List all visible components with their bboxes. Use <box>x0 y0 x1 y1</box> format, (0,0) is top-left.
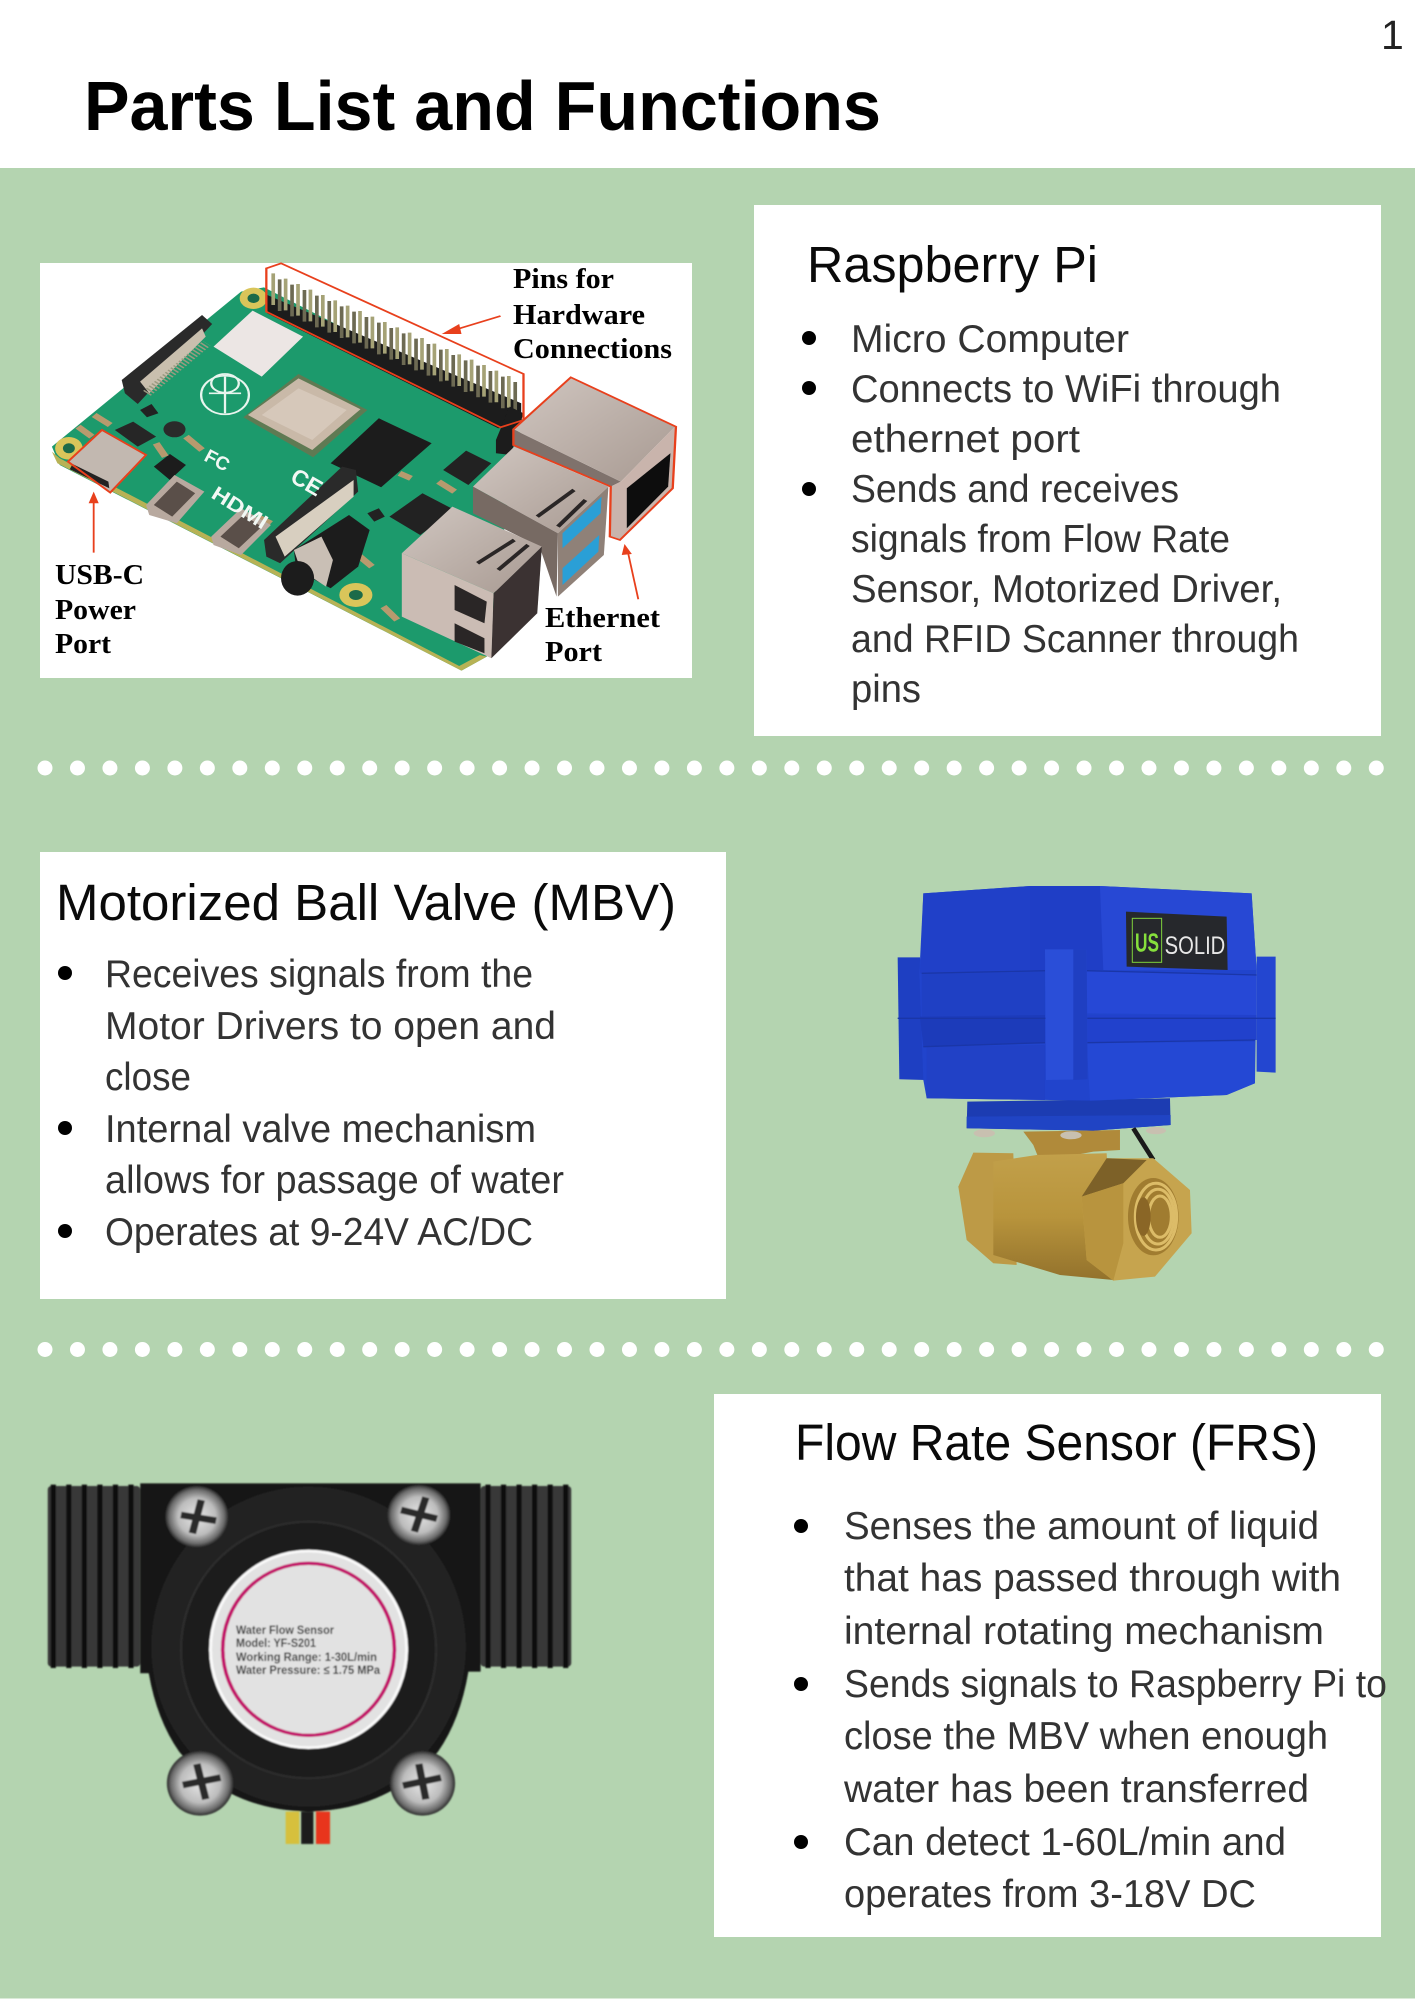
flow rate sensor image <box>48 1483 571 1844</box>
connector strip <box>264 467 358 563</box>
bullet list: Sends signals to Raspberry Pi to <box>844 1663 1387 1706</box>
wires <box>286 1812 330 1844</box>
bullet list <box>58 953 564 1254</box>
bullet list: allows for passage of water <box>105 1159 564 1202</box>
bullet list: Operates at 9-24V AC/DC <box>105 1211 533 1254</box>
usb ports lower <box>402 507 542 658</box>
bullet list <box>794 1505 1387 1916</box>
sensor label text: Water Flow Sensor <box>236 1623 334 1637</box>
bullet list: ethernet port <box>851 418 1080 461</box>
bullet list: Sensor, Motorized Driver, <box>851 568 1282 611</box>
sensor body <box>140 1483 481 1812</box>
ethernet port <box>513 377 676 540</box>
bullet list: signals from Flow Rate <box>851 518 1230 561</box>
panel: Raspberry Pi image <box>40 263 692 678</box>
heading: Raspberry Pi <box>807 236 1098 293</box>
label: ethernet <box>545 602 660 668</box>
label: pins <box>513 263 672 365</box>
label: ethernet: Ethernet <box>545 602 660 634</box>
blue actuator housing <box>898 886 1276 1101</box>
bullet list: Internal valve mechanism <box>105 1108 536 1151</box>
bullet list: Senses the amount of liquid <box>844 1505 1319 1548</box>
bullet list: internal rotating mechanism <box>844 1610 1324 1653</box>
bullet list: Connects to WiFi through <box>851 368 1281 411</box>
screws <box>165 1485 455 1816</box>
brand badge <box>1126 912 1228 970</box>
bullet list: Can detect 1-60L/min and <box>844 1821 1286 1864</box>
gpio pins <box>267 273 521 428</box>
board silkscreen marks: HDMI <box>207 483 272 534</box>
audio jack <box>294 515 370 588</box>
label: ethernet: Port <box>545 636 602 668</box>
brand badge: SOLID <box>1165 932 1225 960</box>
label: usb-c: USB-C <box>55 559 144 591</box>
bullet list: close the MBV when enough <box>844 1715 1328 1758</box>
bullet list: Sends and receives <box>851 468 1179 511</box>
bullet list: and RFID Scanner through <box>851 618 1299 661</box>
bullet list: operates from 3-18V DC <box>844 1873 1256 1916</box>
label: pins: Hardware <box>513 299 645 331</box>
brass body <box>958 1128 1192 1281</box>
motorized ball valve image <box>898 886 1276 1281</box>
usb ports upper <box>473 447 608 597</box>
sensor label text: Model: YF-S201 <box>236 1636 316 1650</box>
label: usb-c <box>55 559 144 660</box>
board silkscreen marks <box>201 446 327 534</box>
sensor label text: Water Pressure: ≤ 1.75 MPa <box>236 1663 380 1677</box>
arrow: ethernet <box>622 544 638 599</box>
raspberry logo <box>201 374 249 414</box>
bullet list <box>802 318 1299 711</box>
small components <box>78 415 455 620</box>
heading: Motorized Ball Valve (MBV) <box>56 874 676 931</box>
sensor label text <box>236 1623 380 1677</box>
panel: Raspberry Pi text <box>754 205 1381 736</box>
bullet list: that has passed through with <box>844 1557 1341 1600</box>
threaded pipe left <box>48 1485 140 1668</box>
page number: 1 <box>1381 12 1404 58</box>
label: pins: Pins for <box>513 263 614 295</box>
panel: Motorized Ball Valve text <box>40 852 726 1299</box>
title: Parts List and Functions <box>84 67 881 145</box>
dotted divider 1 <box>45 760 1380 776</box>
label: usb-c: Port <box>55 628 111 660</box>
bullet list: water has been transferred <box>843 1768 1309 1811</box>
bullet list: Micro Computer <box>851 318 1129 361</box>
raspberry pi board illustration <box>52 263 676 671</box>
board silkscreen marks: FC <box>201 446 233 476</box>
brand badge: US <box>1135 928 1159 958</box>
board silkscreen marks: CE <box>286 463 327 501</box>
bullet list: Receives signals from the <box>105 953 533 996</box>
bullet list: Motor Drivers to open and <box>105 1005 556 1048</box>
label: usb-c: Power <box>55 594 136 626</box>
actuator base <box>967 1098 1171 1139</box>
heading: Flow Rate Sensor (FRS) <box>795 1414 1318 1471</box>
bullet list: pins <box>851 668 921 711</box>
label: pins: Connections <box>513 333 672 365</box>
sensor label text: Working Range: 1-30L/min <box>236 1650 377 1664</box>
hdmi ports <box>146 475 204 523</box>
bullet list: close <box>105 1056 191 1099</box>
panel: Flow Rate Sensor text <box>714 1394 1387 1937</box>
threaded pipe right <box>481 1485 571 1668</box>
arrow: pins <box>442 316 501 334</box>
dotted divider 2 <box>45 1342 1380 1357</box>
usb-c port <box>68 430 146 493</box>
red outline: pins <box>266 263 523 427</box>
arrow: usb-c <box>89 492 99 553</box>
